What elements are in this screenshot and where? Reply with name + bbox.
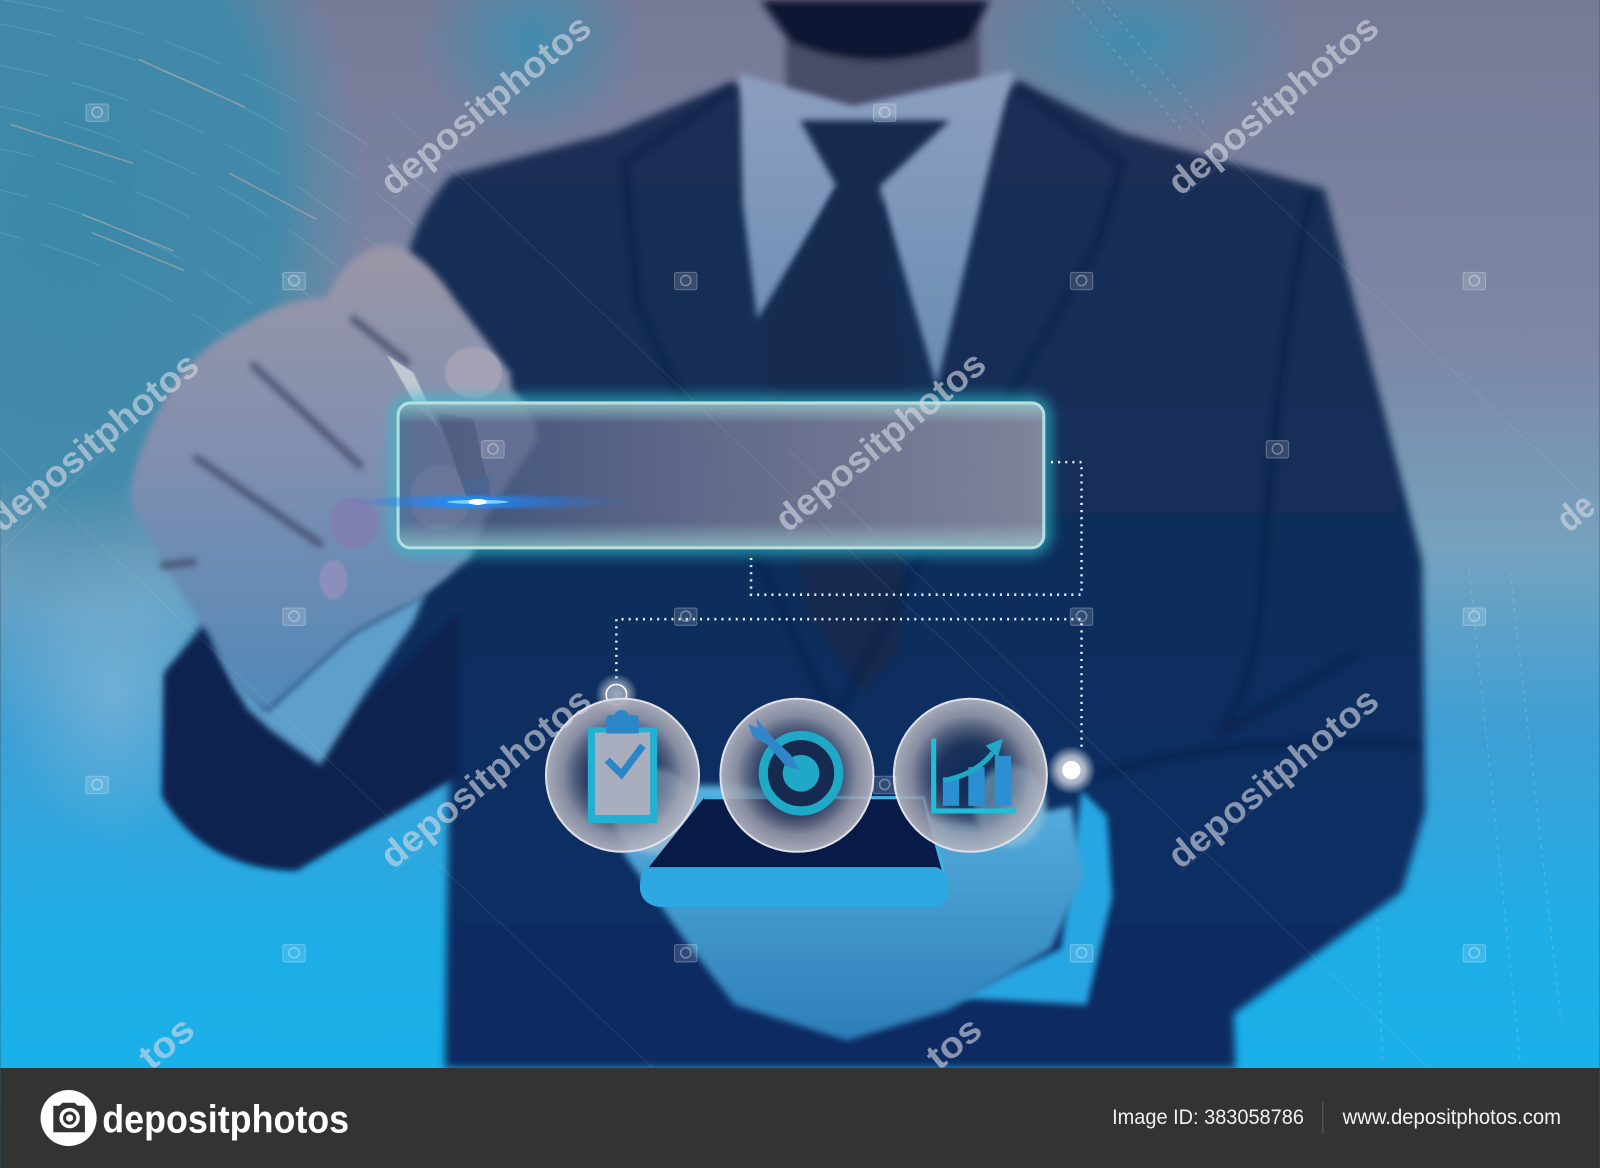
- suit jacket: [163, 81, 1425, 1068]
- suit folds: [625, 87, 1418, 775]
- icon: clipboard with check: [546, 699, 699, 852]
- sleeve shadow: [163, 612, 459, 869]
- right cuff: [954, 791, 1112, 1005]
- watermark text: depositphotos: [1160, 679, 1386, 876]
- person in suit: [163, 0, 1425, 1068]
- tie: [760, 120, 950, 694]
- footer logo: [41, 1090, 349, 1146]
- watermark text: depositphotos: [767, 343, 994, 540]
- pen tip light flare: [347, 496, 633, 508]
- image ID: Image ID: 383058786: [1112, 1105, 1304, 1129]
- logo wordmark: depositphotos: [102, 1098, 349, 1141]
- neck and beard: [760, 0, 990, 112]
- dotted connector lines: [616, 462, 1082, 750]
- connector node: left: [595, 673, 638, 716]
- left hand holding pen: [130, 244, 537, 765]
- watermark text: tos: [918, 1008, 989, 1077]
- fingernails: [320, 347, 502, 600]
- icon: camera logo: [41, 1090, 97, 1146]
- website URL: www.depositphotos.com: [1342, 1105, 1561, 1129]
- smartphone: [640, 798, 949, 907]
- empty glowing text box: [398, 403, 1044, 548]
- shirt cuff: [209, 594, 425, 765]
- watermark text: depositphotos: [372, 6, 599, 203]
- watermark text: tos: [130, 1008, 202, 1077]
- footer bar: [0, 1068, 1600, 1168]
- watermark text: depositphotos: [372, 679, 599, 876]
- lower hand with phone: [612, 765, 1112, 1040]
- icon: rising bar chart: [894, 699, 1047, 852]
- icon: target with arrow: [720, 699, 873, 852]
- fingers behind icons: [612, 765, 1046, 854]
- connector node: right: [1047, 746, 1096, 795]
- hand shape: [130, 244, 537, 712]
- shirt: [740, 70, 1013, 386]
- footer divider: [1322, 1102, 1323, 1134]
- small camera marks: [86, 104, 1485, 962]
- right hand: [623, 785, 1084, 1040]
- watermark text: depositphotos: [1160, 6, 1386, 203]
- pen: [387, 355, 491, 499]
